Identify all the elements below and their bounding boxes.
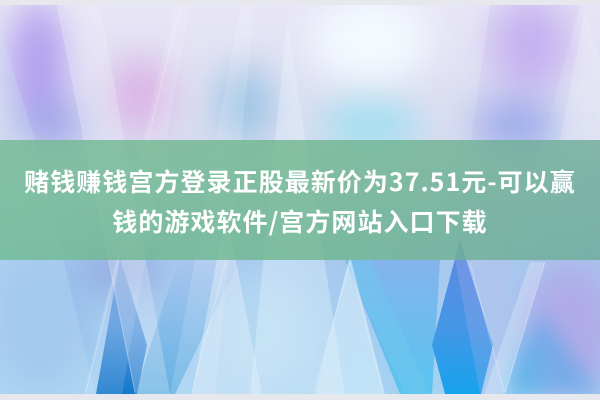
title text: 钱的游戏软件/宫方网站入口下载	[112, 203, 488, 239]
green title band	[0, 140, 600, 260]
translucent light facets	[58, 5, 170, 394]
title text	[24, 163, 576, 239]
thin highlight lines	[58, 8, 545, 392]
title text: 赌钱赚钱宫方登录正股最新价为37.51元-可以赢	[24, 163, 576, 199]
lower facets	[137, 278, 229, 394]
